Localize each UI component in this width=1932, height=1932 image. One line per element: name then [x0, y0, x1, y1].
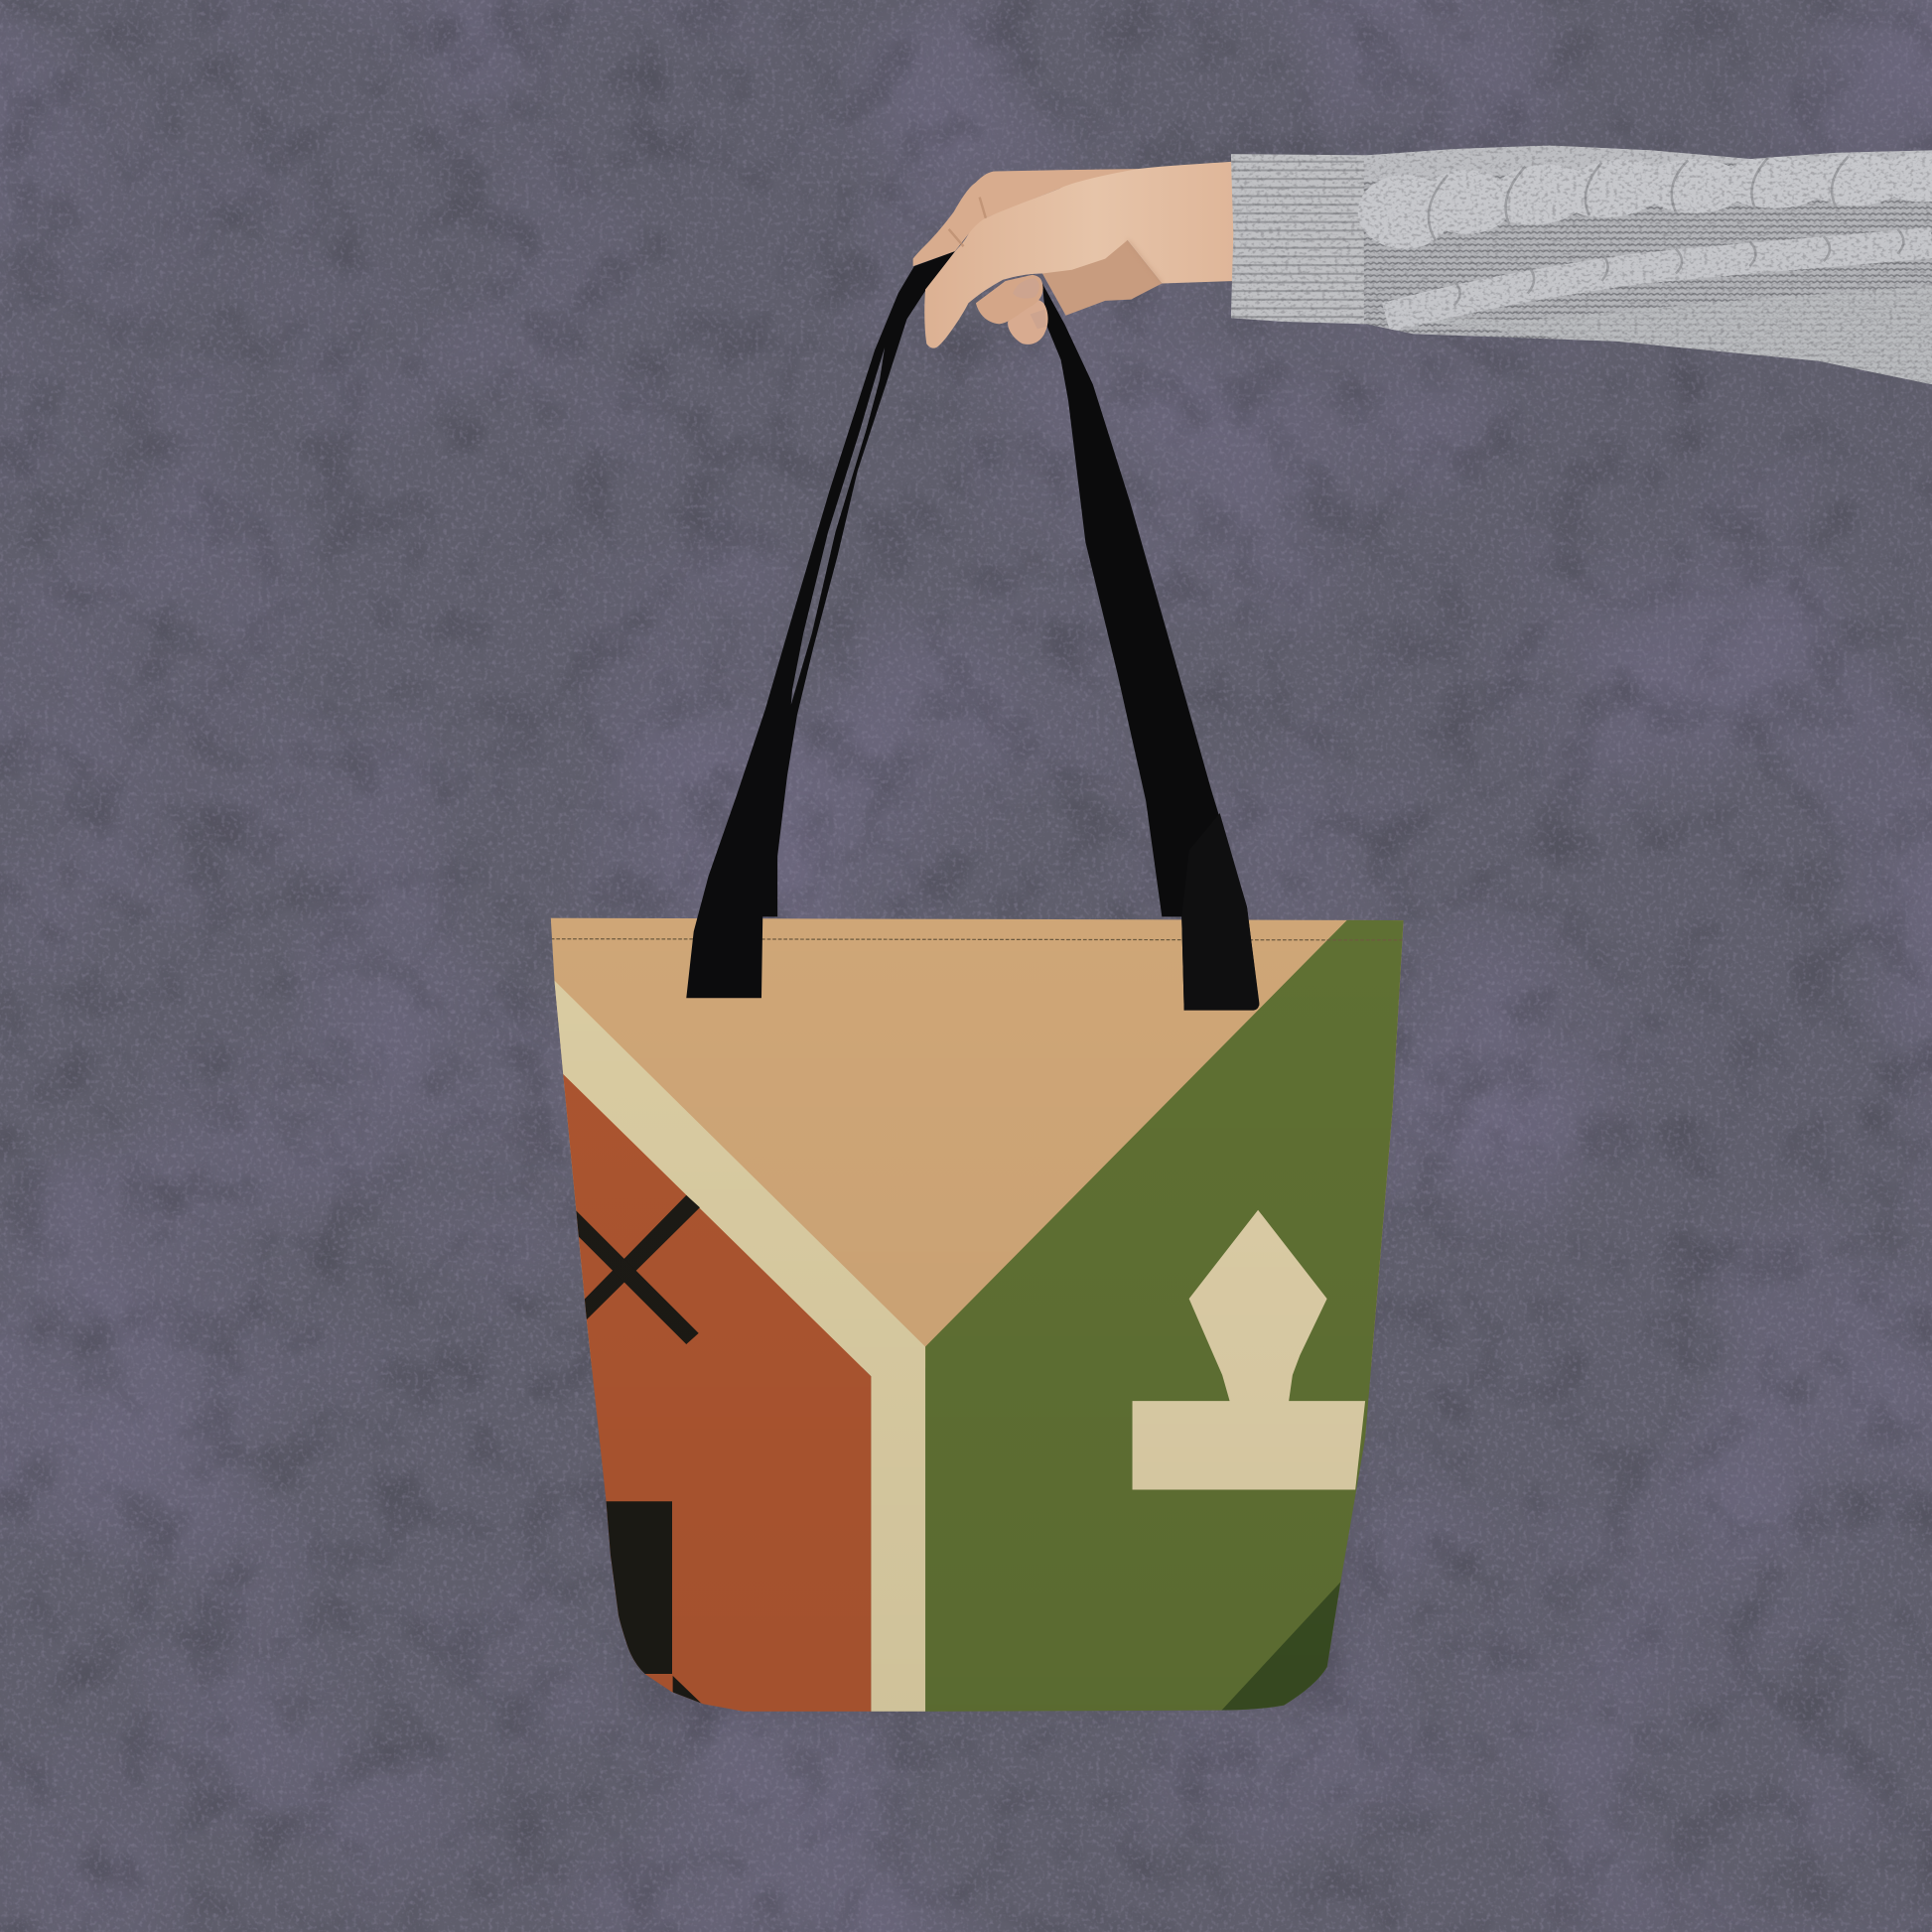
bag shadow [579, 986, 1392, 1716]
sleeve knit [1355, 136, 1932, 394]
middle finger [976, 275, 1043, 324]
orange panel [563, 1074, 872, 1712]
cream Y band [542, 968, 925, 1719]
back of hand, wrist and index finger [924, 162, 1235, 348]
sweater sleeve [1226, 136, 1932, 394]
fabric shading [737, 1541, 925, 1712]
hand: fingers, back of hand and wrist [924, 162, 1235, 348]
black corner triangle [673, 1676, 701, 1704]
sleeve top rib [1361, 142, 1932, 183]
left strap [686, 251, 955, 998]
wrist crease [1128, 240, 1162, 283]
right strap tab [1181, 813, 1259, 1011]
ring finger [1008, 300, 1048, 345]
knuckle crease [949, 198, 986, 246]
bag body [542, 911, 1417, 1719]
tan panel [542, 911, 1417, 1368]
hand: back finger and lower palm [913, 169, 1162, 316]
lower sleeve flecks [1355, 286, 1932, 384]
green panel [925, 918, 1417, 1719]
X mark [573, 1195, 700, 1344]
stitch line [551, 939, 1404, 940]
knit texture [1226, 136, 1932, 394]
cable seams [1429, 157, 1903, 306]
cuff ribbing [1226, 148, 1364, 327]
black block [606, 1501, 672, 1674]
lower cable [1386, 242, 1932, 318]
upper cable [1358, 153, 1932, 249]
right strap [1042, 283, 1259, 1011]
pawn shape [1133, 1210, 1365, 1489]
dark green corner [1221, 1583, 1340, 1711]
